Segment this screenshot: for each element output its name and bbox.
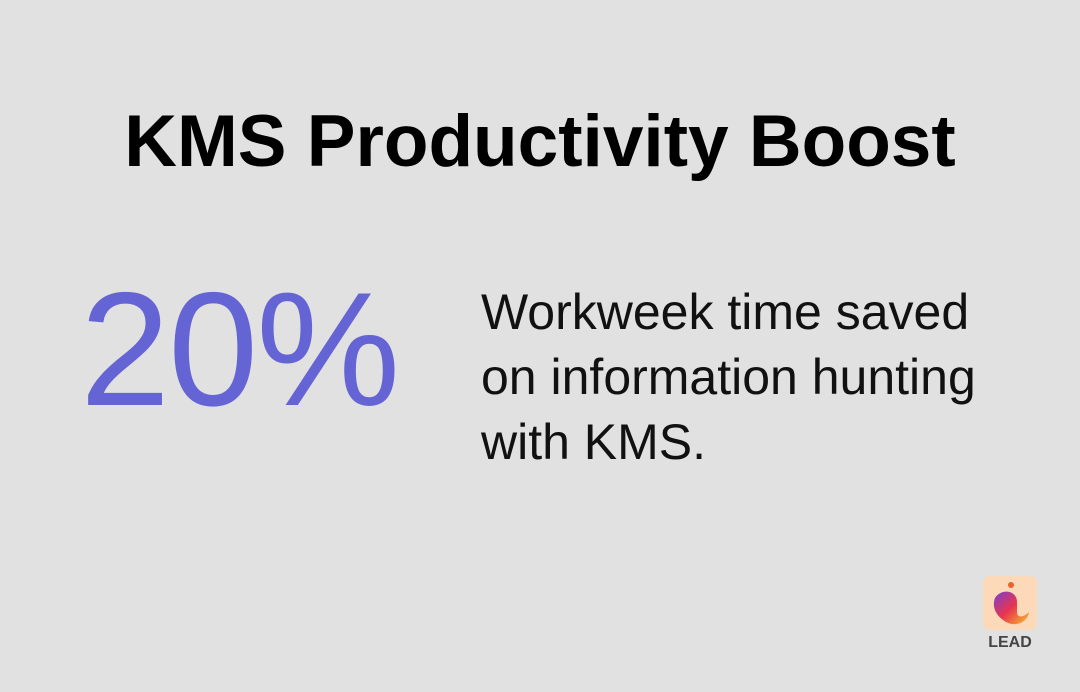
description text (481, 284, 976, 470)
logo: LEAD (983, 576, 1037, 650)
title: KMS Productivity Boost (124, 101, 956, 182)
big stat: 20%: 20% (80, 259, 398, 440)
description text: Workweek time saved (481, 284, 969, 340)
description text: on information hunting (481, 349, 976, 405)
description text: with KMS. (481, 414, 706, 470)
